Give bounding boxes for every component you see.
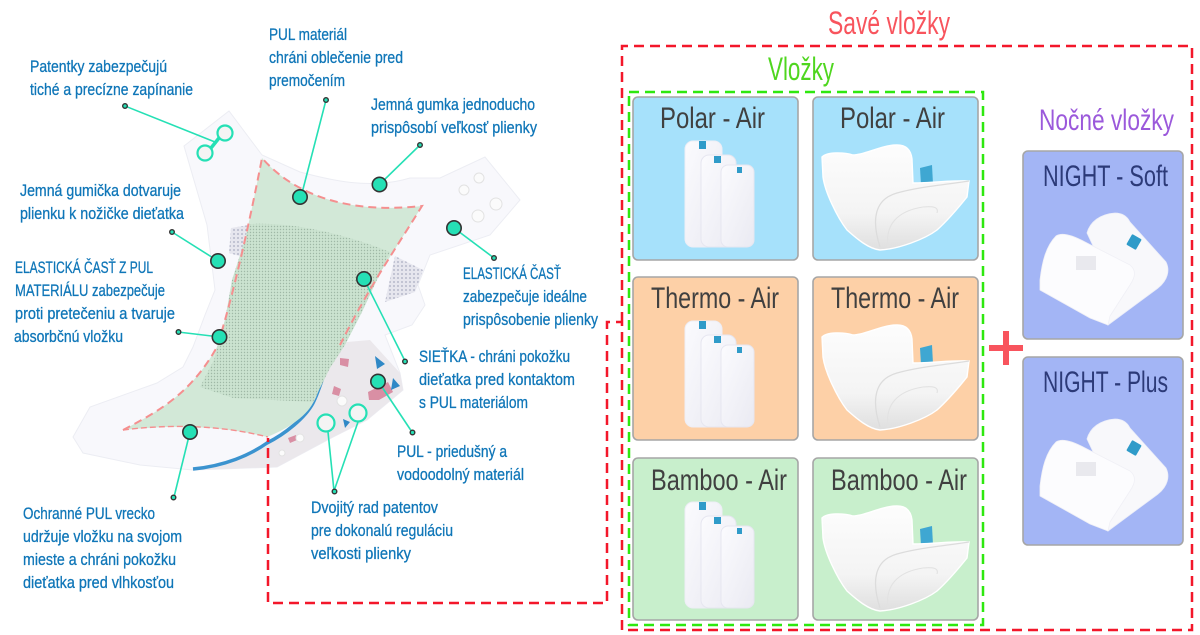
text: elastic PUL part: proti pretečeniu a tvaruje xyxy=(15,304,175,323)
text: PUL breathable: vodoodolný materiál xyxy=(397,465,524,484)
text: elastic waist xyxy=(371,95,537,137)
card: NIGHT - Plus xyxy=(1023,357,1183,545)
text: elastic PUL part: ELASTICKÁ ČASŤ Z PUL xyxy=(15,258,153,277)
blue piping xyxy=(193,347,336,469)
card: Thermo - Air shaped: Thermo - Air xyxy=(831,282,959,315)
text: PUL material: chráni oblečenie pred xyxy=(269,48,403,67)
callout: snaps xyxy=(123,104,232,160)
text: elastic PUL part: MATERIÁLU zabezpečuje xyxy=(15,281,165,300)
frame: inserts green dashed xyxy=(629,92,983,625)
dashed outline xyxy=(123,158,422,430)
green PUL panel xyxy=(123,158,422,437)
text: leg elastic: plienku k nožičke dieťatka xyxy=(20,204,184,223)
text: snaps xyxy=(30,57,193,99)
text: elastic part: zabezpečuje ideálne xyxy=(463,287,587,306)
heading: Vložky: Vložky xyxy=(768,51,834,87)
callout: elastic PUL part xyxy=(176,330,227,344)
snaps right flap xyxy=(279,173,502,456)
text: mesh: s PUL materiálom xyxy=(419,393,528,412)
side mesh frills xyxy=(229,225,423,302)
text: double snaps xyxy=(311,498,453,563)
dashed lower pocket xyxy=(123,426,268,437)
text: mesh: dieťatka pred kontaktom xyxy=(419,370,575,389)
frame: absorbent inserts red dashed with connector xyxy=(268,46,1192,630)
callout: protective pocket xyxy=(171,425,197,500)
text: elastic waist: prispôsobí veľkosť plienky xyxy=(371,118,537,137)
text: elastic part: ELASTICKÁ ČASŤ xyxy=(463,264,561,283)
blue pattern accents xyxy=(343,356,400,428)
card: Bamboo - Air shaped: Bamboo - Air xyxy=(831,464,967,497)
text: protective pocket: Ochranné PUL vrecko xyxy=(23,504,155,523)
text: double snaps: veľkosti plienky xyxy=(311,544,411,563)
heading: Savé vložky: Savé vložky xyxy=(828,5,950,41)
card: Thermo - Air shaped xyxy=(813,277,978,440)
text: elastic waist: Jemná gumka jednoducho xyxy=(371,95,535,114)
text: mesh: SIEŤKA - chráni pokožku xyxy=(419,347,570,366)
card: Polar - Air shaped xyxy=(813,97,978,260)
icon: plus sign xyxy=(989,331,1023,365)
callout: mesh xyxy=(357,272,407,364)
text: mesh xyxy=(419,347,575,412)
text: protective pocket: dieťatka pred vlhkosťou xyxy=(23,573,174,592)
text: PUL material xyxy=(269,25,403,90)
patterned fold xyxy=(193,340,403,470)
callout: elastic part xyxy=(447,221,496,260)
card: Thermo - Air rectangular xyxy=(633,277,798,440)
card: Polar - Air rectangular: Polar - Air xyxy=(660,102,765,135)
text: PUL material: PUL materiál xyxy=(269,25,347,44)
text: elastic part: prispôsobenie plienky xyxy=(463,310,598,329)
diaper illustration xyxy=(73,111,520,470)
card: NIGHT - Soft xyxy=(1023,151,1183,339)
text: PUL breathable xyxy=(397,442,524,484)
card: Bamboo - Air shaped xyxy=(813,458,978,620)
text: snaps: tiché a precízne zapínanie xyxy=(30,80,193,99)
pink pattern accents xyxy=(288,358,393,443)
card: Polar - Air rectangular xyxy=(633,97,798,260)
card: Polar - Air shaped: Polar - Air xyxy=(840,102,945,135)
text: protective pocket: udržuje vložku na svojom xyxy=(23,527,182,546)
callout: PUL breathable xyxy=(371,374,415,435)
text: PUL breathable: PUL - priedušný a xyxy=(397,442,507,461)
mesh panel xyxy=(200,224,390,402)
text: protective pocket xyxy=(23,504,182,592)
card: Bamboo - Air rectangular xyxy=(633,458,798,620)
diaper white body xyxy=(73,111,520,470)
text: elastic part xyxy=(463,264,598,329)
text: leg elastic xyxy=(20,181,184,223)
text: snaps: Patentky zabezpečujú xyxy=(30,57,167,76)
callout: double snaps xyxy=(318,404,366,494)
text: PUL material: premočením xyxy=(269,71,345,90)
text: protective pocket: mieste a chráni pokožku xyxy=(23,550,176,569)
callout: PUL material xyxy=(293,98,328,204)
card: Thermo - Air rectangular: Thermo - Air xyxy=(651,282,779,315)
text: double snaps: Dvojitý rad patentov xyxy=(311,498,438,517)
callout: elastic waist xyxy=(372,143,422,192)
card: Bamboo - Air rectangular: Bamboo - Air xyxy=(651,464,787,497)
text: double snaps: pre dokonalú reguláciu xyxy=(311,521,453,540)
text: elastic PUL part: absorbčnú vložku xyxy=(14,327,123,346)
callout: leg elastic xyxy=(170,230,225,268)
text: leg elastic: Jemná gumička dotvaruje xyxy=(20,181,181,200)
text: elastic PUL part xyxy=(14,258,175,346)
